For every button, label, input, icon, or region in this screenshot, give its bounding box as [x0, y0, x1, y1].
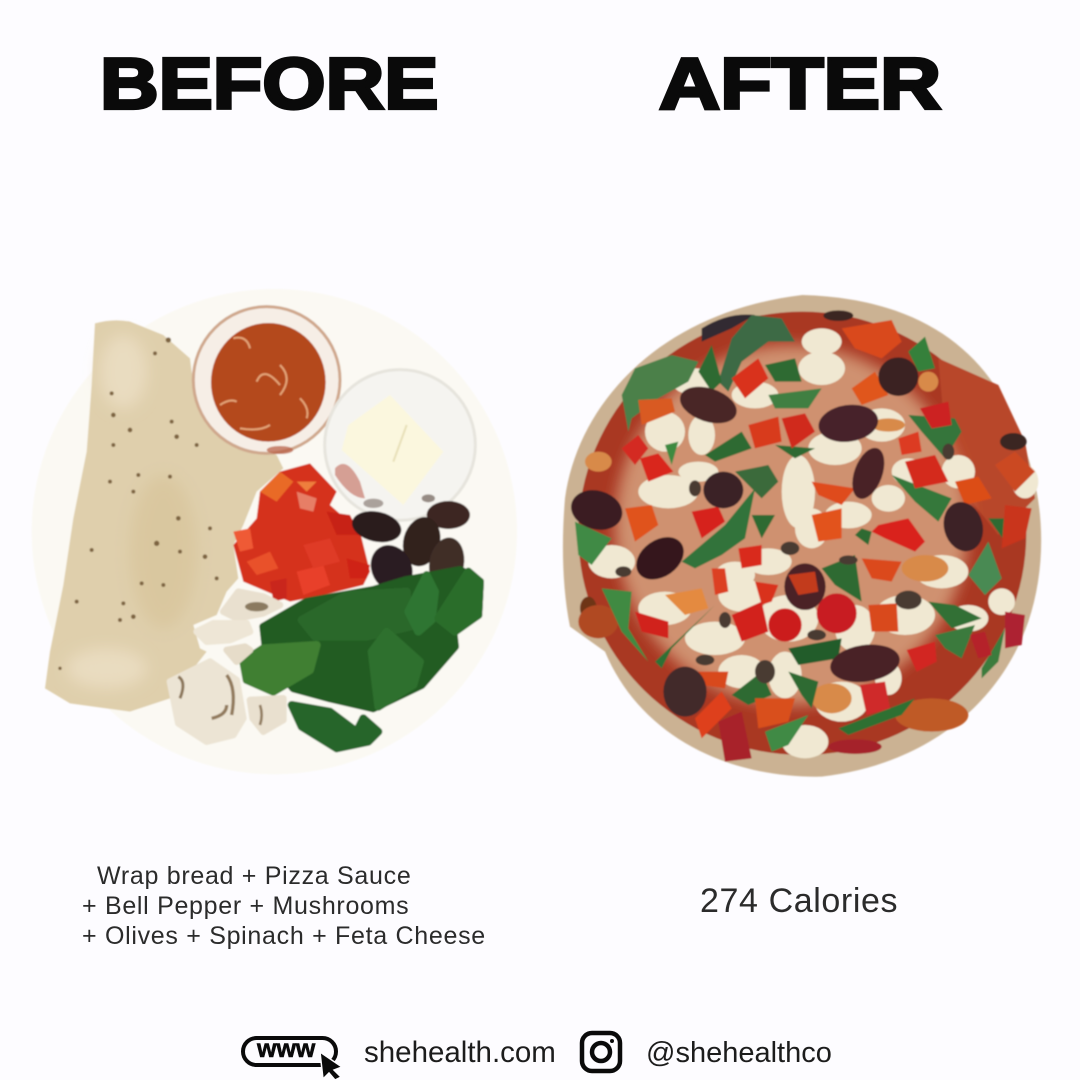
red peppers — [622, 320, 1035, 762]
mushroom specks — [615, 444, 954, 683]
plate — [32, 289, 517, 774]
footer: website and social handle — [243, 1033, 832, 1080]
mushrooms — [170, 592, 283, 742]
melted cheese — [588, 328, 1038, 758]
olives — [567, 357, 988, 717]
orange toasted patches — [585, 372, 948, 713]
text: calorie count: 274 Calories — [700, 882, 898, 920]
text: ingredients list: Wrap bread + Pizza Sauce — [97, 862, 411, 890]
wrap bread — [45, 320, 283, 712]
red bell peppers — [233, 463, 370, 602]
spinach — [575, 315, 1008, 752]
sauce base — [578, 312, 1026, 755]
text: ingredients list — [82, 862, 486, 950]
text: website: shehealth.com — [364, 1036, 556, 1069]
crust — [563, 295, 1041, 777]
photo: plate of raw ingredients — [32, 289, 517, 774]
heading: AFTER: AFTER — [659, 43, 941, 124]
olives — [349, 501, 470, 599]
feta bowl — [325, 370, 475, 520]
sauce bowl — [193, 307, 340, 454]
text: ingredients list: + Bell Pepper + Mushrooms — [82, 892, 409, 920]
text: ingredients list: + Olives + Spinach + Feta Cheese — [82, 922, 486, 950]
icon: instagram — [582, 1033, 620, 1071]
photo: finished pizza — [563, 295, 1041, 777]
icon: www cursor — [243, 1035, 342, 1080]
heading: BEFORE: BEFORE — [100, 45, 438, 124]
text: instagram handle: @shehealthco — [646, 1037, 832, 1069]
spinach leaves — [243, 570, 480, 748]
icon: www cursor: www — [256, 1035, 316, 1063]
